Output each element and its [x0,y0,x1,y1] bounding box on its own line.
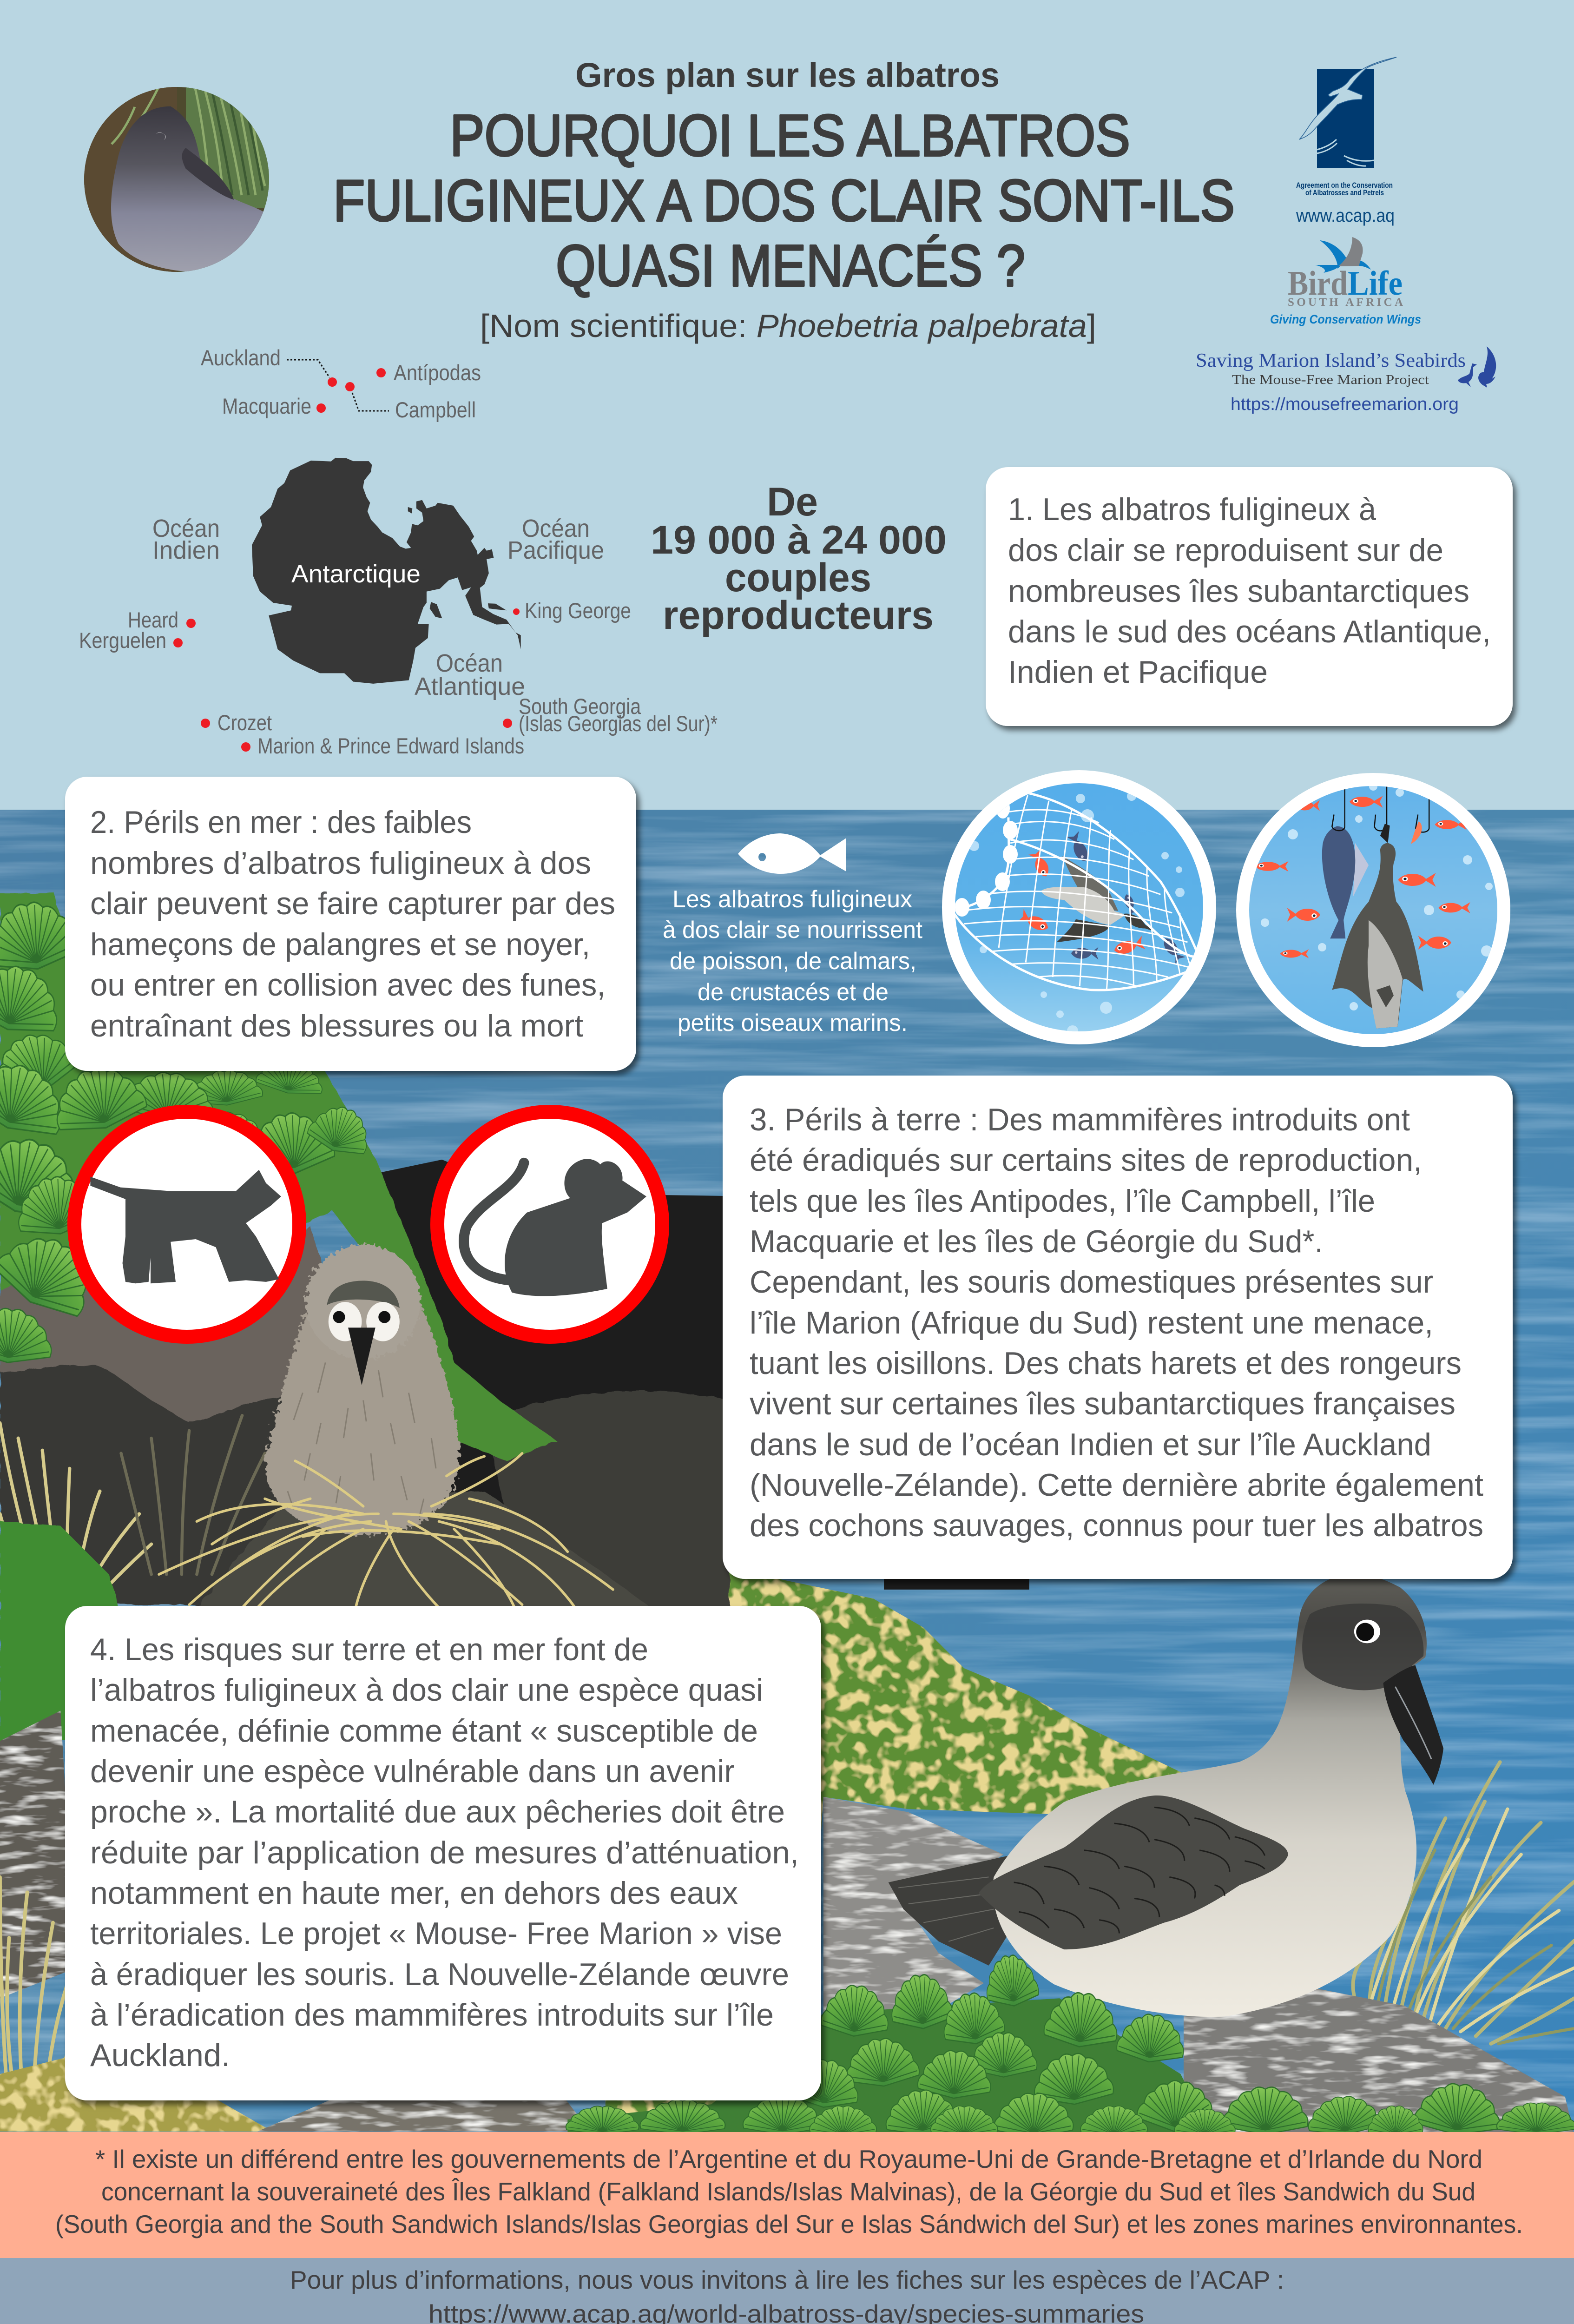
footnote text: concernant la souveraineté des Îles Falkland (Falkland Islands/Islas Malvinas), de la Géorgie du Sud et îles Sandwich du Sud [101,2177,1475,2206]
diet text: Les albatros fuligineux [672,886,912,913]
panel 1: breeding range: nombreuses îles subantarctiques [1008,574,1469,609]
logo: BirdLife South Africa: Giving Conservation Wings [1270,312,1421,326]
panel 3: threats on land: (Nouvelle-Zélande). Cette dernière abrite également [750,1467,1483,1503]
panel 1: breeding range [986,467,1513,726]
kicker heading: Gros plan sur les albatros [575,56,1000,94]
ocean labels: Océan [436,649,503,677]
scientific name: [Nom scientifique: Phoebetria palpebrata ] [480,308,1096,344]
island labels: King George [525,598,631,623]
population statistic: 19 000 à 24 000 [651,518,947,562]
island labels: Auckland [201,345,281,370]
chick head [306,1244,421,1360]
island labels: Macquarie [222,394,311,418]
logo: ACAP: www.acap.aq [1296,205,1395,226]
eye [1354,1620,1380,1643]
map of Antarctic islands [79,345,718,758]
panel 3: threats on land: Macquarie et les îles de Géorgie du Sud*. [750,1224,1323,1259]
main title [333,103,1235,298]
yellow grass lower left [0,1877,83,2097]
panel 1: breeding range: dos clair se reproduisent sur de [1008,533,1443,568]
island labels: Kerguelen [79,628,166,653]
logo: Mouse-Free Marion [1196,346,1496,414]
net mesh [953,792,1199,990]
panel 3: threats on land: tuant les oisillons. Des chats harets et des rongeurs [750,1346,1462,1381]
chick beak [348,1327,375,1385]
panel 4: status and conservation [65,1606,821,2100]
panel 4: status and conservation: menacée, définie comme étant « susceptible de [90,1713,758,1749]
panel 4: status and conservation: réduite par l’application de mesures d’atténuation, [90,1835,799,1870]
panel 2: threats at sea: ou entrer en collision avec des funes, [90,967,606,1003]
yellow grass tuft upper left [0,1423,151,1608]
fish on hook [1353,843,1369,896]
panel 3: threats on land: des cochons sauvages, connus pour tuer les albatros [750,1508,1483,1543]
logo: BirdLife South Africa [1270,237,1421,326]
panel 4: status and conservation: l’albatros fuligineux à dos clair une espèce quasi [90,1672,763,1708]
black mountain [363,1160,726,1604]
trapped bird [1062,856,1118,911]
cushion plants foreground [566,1953,1574,2138]
green moss lower left [0,1521,133,1741]
green slope [0,893,557,1461]
island labels: Campbell [395,397,476,422]
panel 3: threats on land [723,1076,1513,1579]
population statistic: reproducteurs [663,593,934,638]
panel 4: status and conservation: devenir une espèce vulnérable dans un avenir [90,1754,735,1789]
wing [979,1796,1288,1949]
panel 2: threats at sea: 2. Périls en mer : des faibles [90,805,472,840]
leader lines [287,360,389,411]
footer text [290,2265,1284,2324]
panel 4: status and conservation: à l’éradication des mammifères introduits sur l’île [90,1997,774,2033]
ocean labels: Océan [522,515,590,542]
grey rock lower left [0,1710,76,1998]
panel 3: threats on land: Cependant, les souris domestiques présentes sur [750,1264,1433,1300]
ocean labels [152,515,604,700]
panel 4: status and conservation: proche ». La mortalité due aux pêcheries doit être [90,1794,785,1829]
island labels: South Georgia [519,694,641,719]
panel 1: breeding range: Indien et Pacifique [1008,654,1268,690]
base greenery [567,1998,1211,2134]
island dots [173,368,520,752]
icon: no mice [437,1112,662,1337]
footer text: Pour plus d’informations, nous vous invitons à lire les fiches sur les espèces de l’ACAP : [290,2265,1284,2294]
rock beneath albatross [1184,1986,1574,2134]
panel 4: status and conservation: territoriales. Le projet « Mouse- Free Marion » vise [90,1916,782,1951]
ocean labels: Indien [152,536,220,564]
panel 2: threats at sea: entraînant des blessures ou la mort [90,1008,583,1043]
icon: no cats [74,1112,299,1337]
panel 3: threats on land: tels que les îles Antipodes, l’île Campbell, l’île [750,1183,1375,1219]
label: Antarctique: Antarctique [291,560,421,588]
island labels [79,345,718,758]
black strip of rock under card [884,1579,1029,1590]
panel 4: status and conservation: notamment en haute mer, en dehors des eaux [90,1875,738,1911]
panel 3: threats on land: vivent sur certaines îles subantarctiques françaises [750,1386,1455,1421]
logo: ACAP: Agreement on the Conservation [1296,181,1393,190]
footnote text: (South Georgia and the South Sandwich Islands/Islas Georgias del Sur e Islas Sándwich del Sur) et les zones marines environnantes. [55,2210,1523,2238]
panel 4: status and conservation: 4. Les risques sur terre et en mer font de [90,1632,648,1667]
nest mound [197,1491,651,1608]
panel 2: threats at sea [65,777,636,1071]
panel 2: threats at sea: nombres d’albatros fuligineux à dos [90,845,591,881]
logo: BirdLife South Africa: SOUTH AFRICA [1288,296,1403,309]
dark head mask [1302,1604,1423,1690]
panel 1: breeding range: dans le sud des océans Atlantique, [1008,614,1491,649]
illustrated coastal scene [0,810,1574,2139]
diet text: petits oiseaux marins. [678,1010,908,1037]
yellow moss lower left [0,2051,272,2132]
tussock grass right [1353,1762,1574,2044]
logo: Mouse-Free Marion: Saving Marion Island’s Seabirds [1196,350,1466,371]
island labels: (Islas Georgias del Sur)* [519,711,718,736]
diet text: de crustacés et de [698,979,889,1006]
panel 4: status and conservation: Auckland. [90,2038,230,2073]
panel 3: threats on land: l’île Marion (Afrique du Sud) restent une menace, [750,1305,1433,1340]
tail [889,1855,1024,1966]
large albatross [889,1574,1443,2017]
main title: POURQUOI LES ALBATROS [450,103,1130,168]
main title: FULIGINEUX A DOS CLAIR SONT-ILS [333,168,1235,233]
cushion plants left [0,896,500,1598]
panel 3: threats on land: 3. Périls à terre : Des mammifères introduits ont [750,1102,1410,1137]
island labels: Marion & Prince Edward Islands [257,733,524,758]
main title: QUASI MENACÉS ? [556,233,1025,298]
body [993,1574,1427,2017]
panel 2: threats at sea: hameçons de palangres et se noyer, [90,927,590,962]
Antarctica silhouette [252,458,521,684]
beak [1383,1665,1443,1785]
footnote text: * Il existe un différend entre les gouvernements de l’Argentine et du Royaume-Uni de Grande-Bretagne et d’Irlande du Nord [95,2145,1482,2173]
chick body [265,1287,459,1535]
dark hillside [0,1365,341,1604]
island labels: Heard [128,607,178,632]
logo: Mouse-Free Marion: https://mousefreemarion.org [1231,395,1459,414]
grey rock at base [257,2092,590,2132]
net floats [955,798,1018,917]
logo: BirdLife South Africa: Bird [1288,264,1348,303]
footnote band [0,2132,1574,2258]
illustration: albatross caught in net [942,770,1216,1044]
icon: fish [738,833,846,874]
nest straw [159,1453,613,1608]
population statistic: couples [725,555,871,600]
panel 4: status and conservation: à éradiquer les souris. La Nouvelle-Zélande œuvre [90,1957,789,1992]
population statistic [651,480,947,638]
panel 3: threats on land: dans le sud de l’océan Indien et sur l’île Auckland [750,1427,1431,1462]
panel 3: threats on land: été éradiqués sur certains sites de reproduction, [750,1142,1422,1178]
dead albatross [1332,843,1423,1029]
ocean labels: Pacifique [507,536,604,564]
island labels: Crozet [217,710,272,735]
footer band [0,2258,1574,2324]
dark grey hill [484,1391,730,1612]
chick [265,1244,459,1535]
logo: ACAP: of Albatrosses and Petrels [1305,188,1384,197]
logo: BirdLife South Africa: Life [1348,264,1403,303]
photo of sooty albatross [84,87,274,272]
illustration: albatross on longline hook [1236,773,1510,1047]
island labels: Antípodas [394,360,481,385]
logo: Mouse-Free Marion: The Mouse-Free Marion Project [1232,372,1429,387]
diet text [663,886,923,1037]
grey rock behind chick [0,1226,345,1514]
diet text: de poisson, de calmars, [670,948,916,975]
logo: ACAP [1296,57,1396,226]
ocean labels: Atlantique [415,673,525,700]
green and yellow hillside right [606,1565,1185,2119]
panel 1: breeding range: 1. Les albatros fuligineux à [1008,492,1376,527]
ocean labels: Océan [152,515,220,542]
diet text: à dos clair se nourrissent [663,917,923,944]
panel 2: threats at sea: clair peuvent se faire capturer par des [90,886,615,921]
sea [0,810,1574,2139]
population statistic: De [767,480,818,524]
grey boulder right [823,1797,1003,2028]
footnote text [55,2145,1523,2238]
